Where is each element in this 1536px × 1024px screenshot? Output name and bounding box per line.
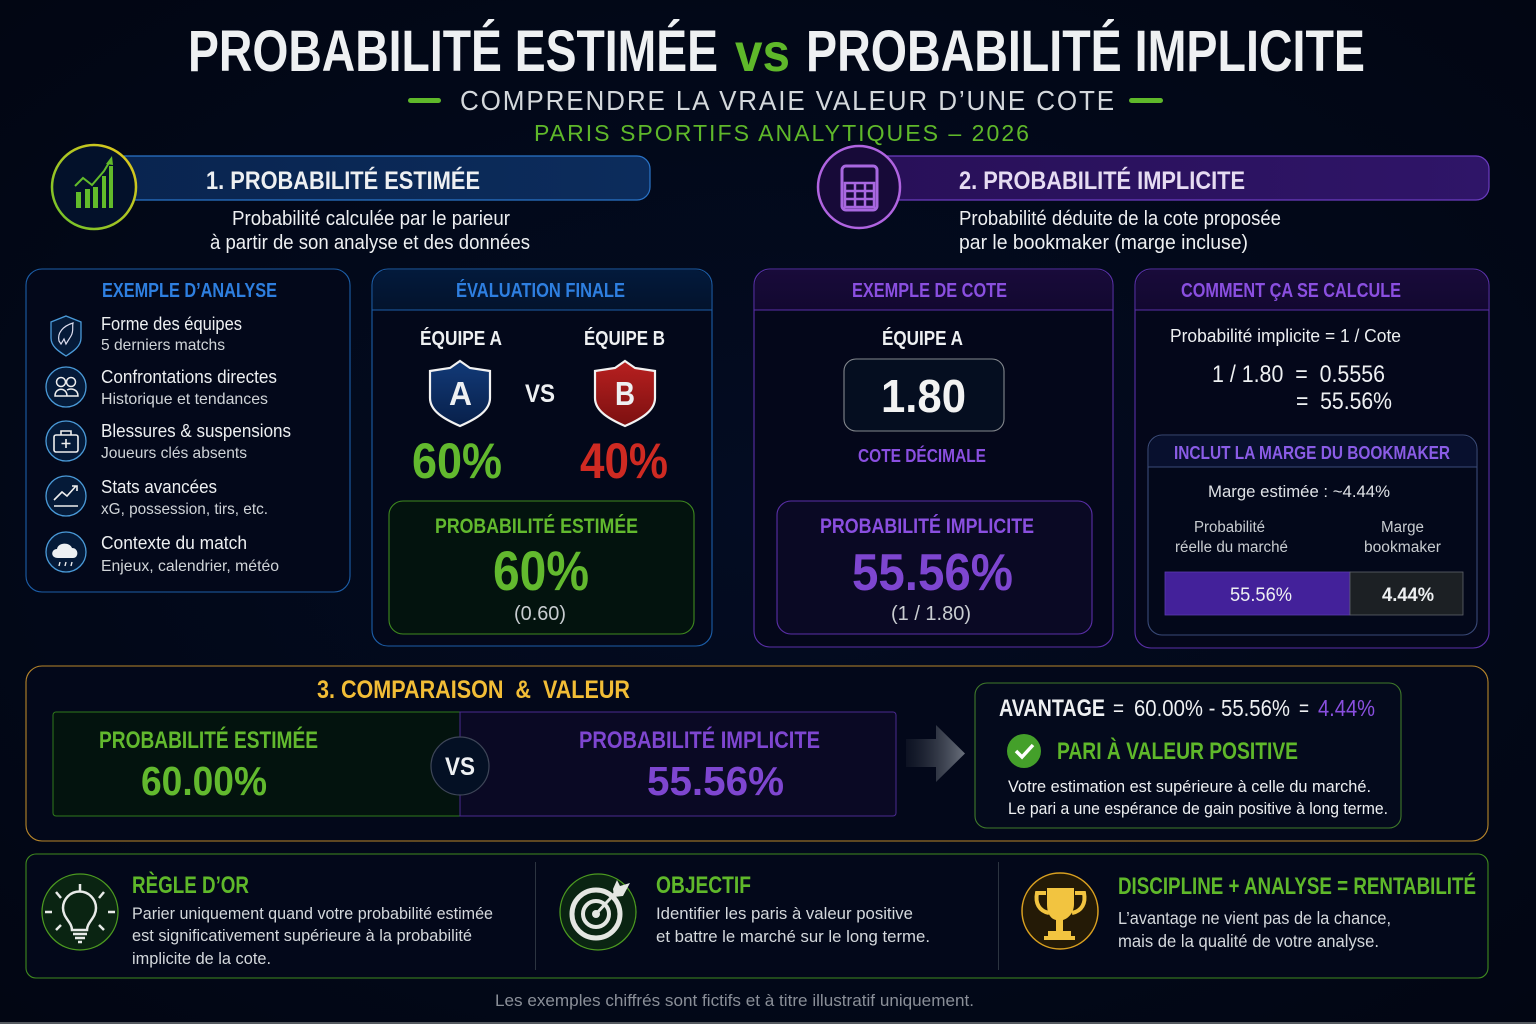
panel: comparaison et valeur [26, 666, 1488, 841]
stacked bar: 55.56% [1230, 585, 1292, 606]
banner: probabilité estimée [100, 156, 650, 200]
panel heading: COMMENT ÇA SE CALCULE [1181, 280, 1401, 302]
item: confrontations directes: Historique et tendances [101, 391, 268, 408]
tip: objectif: OBJECTIF [656, 872, 751, 899]
description: Probabilité calculée par le parieur [232, 208, 510, 230]
team B: B [615, 375, 635, 412]
item: stats avancées: xG, possession, tirs, etc. [101, 501, 268, 518]
result box: probabilité estimée: (0.60) [514, 603, 566, 625]
stacked bar: 4.44% [1382, 585, 1434, 606]
section 2 header [818, 146, 1489, 254]
panel: évaluation finale [372, 269, 712, 646]
heading: 2. PROBABILITÉ IMPLICITE [959, 166, 1245, 195]
sub-panel: marge du bookmaker: bookmaker [1364, 539, 1441, 556]
item: contexte du match: Contexte du match [101, 533, 247, 553]
result box: probabilité estimée: PROBABILITÉ ESTIMÉE [435, 515, 638, 538]
sub-panel: marge du bookmaker [1148, 435, 1477, 635]
result box: probabilité implicite: PROBABILITÉ IMPLICITE [820, 515, 1034, 538]
result box: probabilité estimée [389, 501, 694, 634]
formula [1170, 326, 1401, 415]
icon: light bulb [42, 874, 118, 950]
comparison: implicite [460, 712, 896, 816]
description [959, 208, 1281, 254]
item: forme des équipes: 5 derniers matchs [101, 337, 225, 354]
item: confrontations directes [46, 367, 277, 408]
result box: avantage: Le pari a une espérance de gain positive à long terme. [1008, 799, 1388, 818]
odds box [844, 359, 1004, 431]
item: stats avancées: Stats avancées [101, 477, 217, 497]
comparison: implicite: 55.56% [647, 758, 784, 804]
panel heading: 3. COMPARAISON & VALEUR [317, 676, 630, 704]
title: PROBABILITÉ ESTIMÉE [188, 19, 718, 84]
panel heading: ÉVALUATION FINALE [456, 279, 625, 302]
vs label: VS [525, 380, 555, 408]
title [188, 19, 1365, 84]
section 1 header [52, 145, 650, 254]
result box: probabilité implicite: 55.56% [852, 544, 1013, 602]
title: PROBABILITÉ IMPLICITE [806, 19, 1365, 84]
tip: objectif [560, 872, 930, 950]
footer note: Les exemples chiffrés sont fictifs et à titre illustratif uniquement. [495, 991, 974, 1010]
item: blessures & suspensions [46, 421, 291, 462]
vs badge: VS [445, 753, 475, 781]
tagline: PARIS SPORTIFS ANALYTIQUES – 2026 [534, 120, 1031, 146]
vs badge [431, 737, 489, 795]
result box: avantage: AVANTAGE [999, 695, 1105, 722]
result box: avantage [975, 683, 1401, 828]
sub-panel: marge du bookmaker: réelle du marché [1175, 539, 1288, 556]
banner: probabilité implicite [860, 156, 1489, 200]
icon: check [1007, 734, 1041, 768]
tip: règle d'or [42, 871, 493, 968]
panel: comment ça se calcule [1135, 269, 1489, 648]
result box: avantage: 60.00% - 55.56% [1134, 695, 1290, 721]
description: par le bookmaker (marge incluse) [959, 232, 1248, 254]
icon: trophy [1022, 873, 1098, 949]
formula: 1 / 1.80 = 0.5556 [1212, 361, 1385, 388]
formula: = 55.56% [1296, 388, 1392, 415]
icon: target [560, 874, 636, 950]
team A: 60% [412, 433, 502, 489]
sub-panel: marge du bookmaker: INCLUT LA MARGE DU BOOKMAKER [1174, 443, 1450, 463]
item: forme des équipes [51, 314, 242, 356]
comparison: estimée: PROBABILITÉ ESTIMÉE [99, 726, 318, 754]
team A: A [449, 375, 472, 412]
tip: discipline [1022, 872, 1476, 951]
tip: règle d'or: RÈGLE D’OR [132, 871, 249, 899]
tip: discipline: mais de la qualité de votre analyse. [1118, 931, 1379, 951]
description [210, 208, 530, 254]
panel: conseils [26, 854, 1488, 978]
result box: probabilité implicite [777, 501, 1092, 634]
tip: règle d'or: implicite de la cote. [132, 949, 271, 968]
comparison: estimée [53, 712, 460, 816]
team label: ÉQUIPE A [882, 327, 963, 350]
sub-panel: marge du bookmaker: Marge estimée : ~4.44% [1208, 482, 1390, 501]
icon: growth chart [52, 145, 136, 229]
team A [412, 327, 502, 489]
panel heading: EXEMPLE DE COTE [852, 280, 1007, 302]
tip: règle d'or: est significativement supérieure à la probabilité [132, 926, 472, 945]
result box: avantage: Votre estimation est supérieure à celle du marché. [1008, 777, 1371, 796]
comparison: estimée: 60.00% [141, 758, 267, 804]
panel heading: EXEMPLE D’ANALYSE [102, 280, 277, 302]
stacked bar [1165, 572, 1463, 615]
item: forme des équipes: Forme des équipes [101, 314, 242, 334]
result box: avantage: = [1299, 695, 1309, 721]
item: stats avancées [46, 476, 268, 518]
team B: 40% [580, 433, 668, 489]
item: confrontations directes: Confrontations directes [101, 367, 277, 387]
description: Probabilité déduite de la cote proposée [959, 208, 1281, 230]
result box: avantage: 4.44% [1318, 695, 1375, 721]
comparison: implicite: PROBABILITÉ IMPLICITE [579, 726, 820, 754]
item: blessures & suspensions: Blessures & suspensions [101, 421, 291, 441]
tip: objectif: Identifier les paris à valeur positive [656, 904, 913, 923]
result box: probabilité estimée: 60% [493, 539, 589, 602]
sub-panel: marge du bookmaker: Probabilité [1194, 519, 1265, 536]
arrow [906, 725, 965, 782]
result box: avantage: = [1113, 695, 1124, 721]
panel: exemple d'analyse [26, 269, 350, 592]
tip: objectif: et battre le marché sur le long terme. [656, 927, 930, 946]
formula: Probabilité implicite = 1 / Cote [1170, 326, 1401, 346]
item: blessures & suspensions: Joueurs clés absents [101, 445, 247, 462]
odds caption: COTE DÉCIMALE [858, 445, 986, 466]
result box: avantage: PARI À VALEUR POSITIVE [1057, 737, 1298, 765]
result box: probabilité implicite: (1 / 1.80) [891, 603, 971, 625]
sub-panel: marge du bookmaker: Marge [1381, 519, 1424, 536]
icon: calculator [818, 146, 900, 228]
heading: 1. PROBABILITÉ ESTIMÉE [206, 166, 480, 195]
item: contexte du match: Enjeux, calendrier, météo [101, 558, 279, 575]
item: contexte du match [46, 532, 279, 575]
subtitle: COMPRENDRE LA VRAIE VALEUR D’UNE COTE [460, 85, 1116, 116]
panel: exemple de cote [754, 269, 1113, 647]
description: à partir de son analyse et des données [210, 232, 530, 254]
team B: ÉQUIPE B [584, 327, 665, 350]
team A: ÉQUIPE A [420, 327, 502, 350]
odds box: 1.80 [881, 370, 966, 422]
title: vs [735, 23, 790, 83]
team B [580, 327, 668, 489]
tip: discipline: L’avantage ne vient pas de la chance, [1118, 908, 1391, 928]
tip: règle d'or: Parier uniquement quand votre probabilité estimée [132, 904, 493, 923]
